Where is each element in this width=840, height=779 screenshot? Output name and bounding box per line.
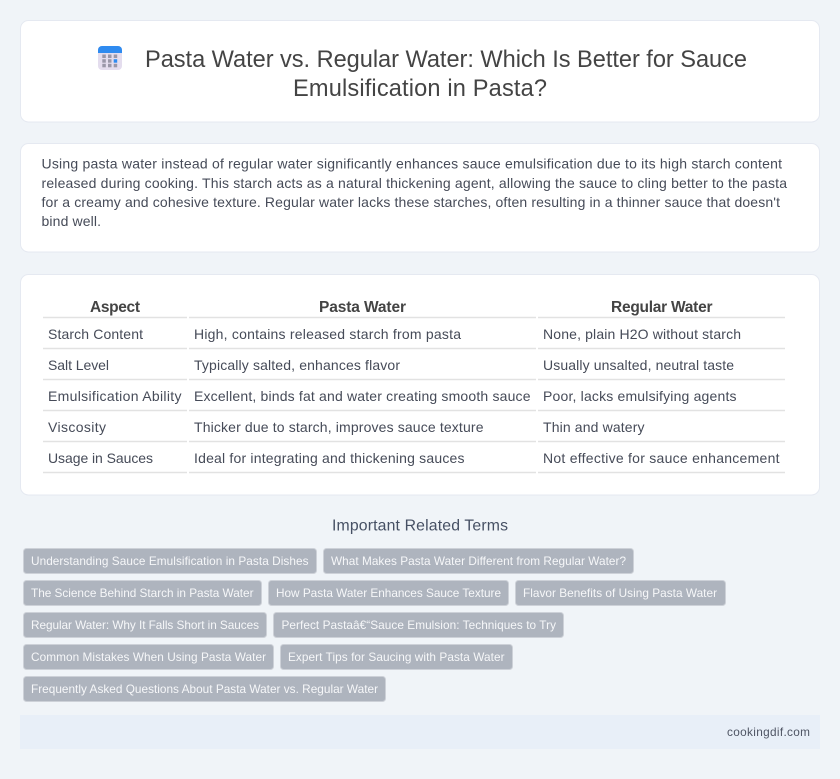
row: salt level — [48, 357, 734, 373]
row: salt level: Usually unsalted, neutral taste — [543, 357, 734, 373]
tag: What Makes Pasta Water Different from Regular Water? — [331, 554, 626, 568]
panel: intro paragraph — [20, 144, 820, 252]
row: emulsification ability: Emulsification Ability — [48, 388, 182, 404]
heading: related terms: Important Related Terms — [332, 518, 508, 534]
text block: intro: for a creamy and cohesive texture. Regular water lacks these starches, often resulting in a thinner sauce that doesn't — [42, 194, 780, 210]
tag: How Pasta Water Enhances Sauce Texture — [276, 586, 501, 600]
tag — [24, 612, 266, 638]
tag — [280, 644, 512, 670]
tag — [24, 644, 274, 670]
row: starch content: High, contains released starch from pasta — [194, 326, 461, 342]
row: starch content: None, plain H2O without starch — [543, 326, 741, 342]
text block: intro: Using pasta water instead of regular water significantly enhances sauce emulsification due to its high starch content — [42, 156, 782, 172]
footer: cookingdif.com — [727, 725, 810, 739]
tag list — [24, 548, 726, 702]
title — [145, 47, 747, 102]
title: Pasta Water vs. Regular Water: Which Is Better for Sauce — [145, 47, 747, 73]
text block: intro — [42, 156, 787, 229]
row: starch content: Starch Content — [48, 326, 143, 342]
tag: Expert Tips for Saucing with Pasta Water — [288, 650, 505, 664]
tag — [324, 548, 634, 574]
row: viscosity: Thin and watery — [543, 419, 644, 435]
tag — [268, 580, 508, 606]
table header — [90, 299, 712, 316]
row: usage in sauces — [48, 450, 780, 466]
tag — [274, 612, 564, 638]
tag — [24, 676, 386, 702]
row: usage in sauces: Ideal for integrating and thickening sauces — [194, 450, 464, 466]
row: viscosity — [48, 419, 644, 435]
row: viscosity: Viscosity — [48, 419, 106, 435]
tag: Frequently Asked Questions About Pasta Water vs. Regular Water — [31, 682, 378, 696]
icon: calendar — [98, 46, 122, 70]
row: emulsification ability: Poor, lacks emulsifying agents — [543, 388, 736, 404]
panel: comparison table — [20, 274, 820, 495]
row: emulsification ability: Excellent, binds fat and water creating smooth sauce — [194, 388, 531, 404]
tag: Understanding Sauce Emulsification in Pasta Dishes — [31, 554, 309, 568]
table header: Pasta Water — [319, 299, 406, 316]
panel: header — [20, 20, 820, 122]
row: salt level: Salt Level — [48, 357, 109, 373]
table header: Regular Water — [611, 299, 712, 316]
title: Emulsification in Pasta? — [293, 76, 547, 102]
tag — [24, 580, 262, 606]
table header: Aspect — [90, 299, 140, 316]
footer — [20, 715, 820, 749]
tag — [516, 580, 726, 606]
row: usage in sauces: Usage in Sauces — [48, 450, 153, 466]
row: viscosity: Thicker due to starch, improves sauce texture — [194, 419, 484, 435]
row: starch content — [48, 326, 741, 342]
tag — [24, 548, 316, 574]
text block: intro: bind well. — [42, 213, 101, 229]
tag: Perfect Pastaâ€“Sauce Emulsion: Techniques to Try — [282, 618, 556, 632]
row: emulsification ability — [48, 388, 736, 404]
tag: Regular Water: Why It Falls Short in Sauces — [31, 618, 259, 632]
row: salt level: Typically salted, enhances flavor — [194, 357, 400, 373]
tag: The Science Behind Starch in Pasta Water — [31, 586, 254, 600]
tag: Flavor Benefits of Using Pasta Water — [523, 586, 717, 600]
text block: intro: released during cooking. This starch acts as a natural thickening agent, allowing the sauce to cling better to the pasta — [42, 175, 787, 191]
tag: Common Mistakes When Using Pasta Water — [31, 650, 266, 664]
row: usage in sauces: Not effective for sauce enhancement — [543, 450, 780, 466]
